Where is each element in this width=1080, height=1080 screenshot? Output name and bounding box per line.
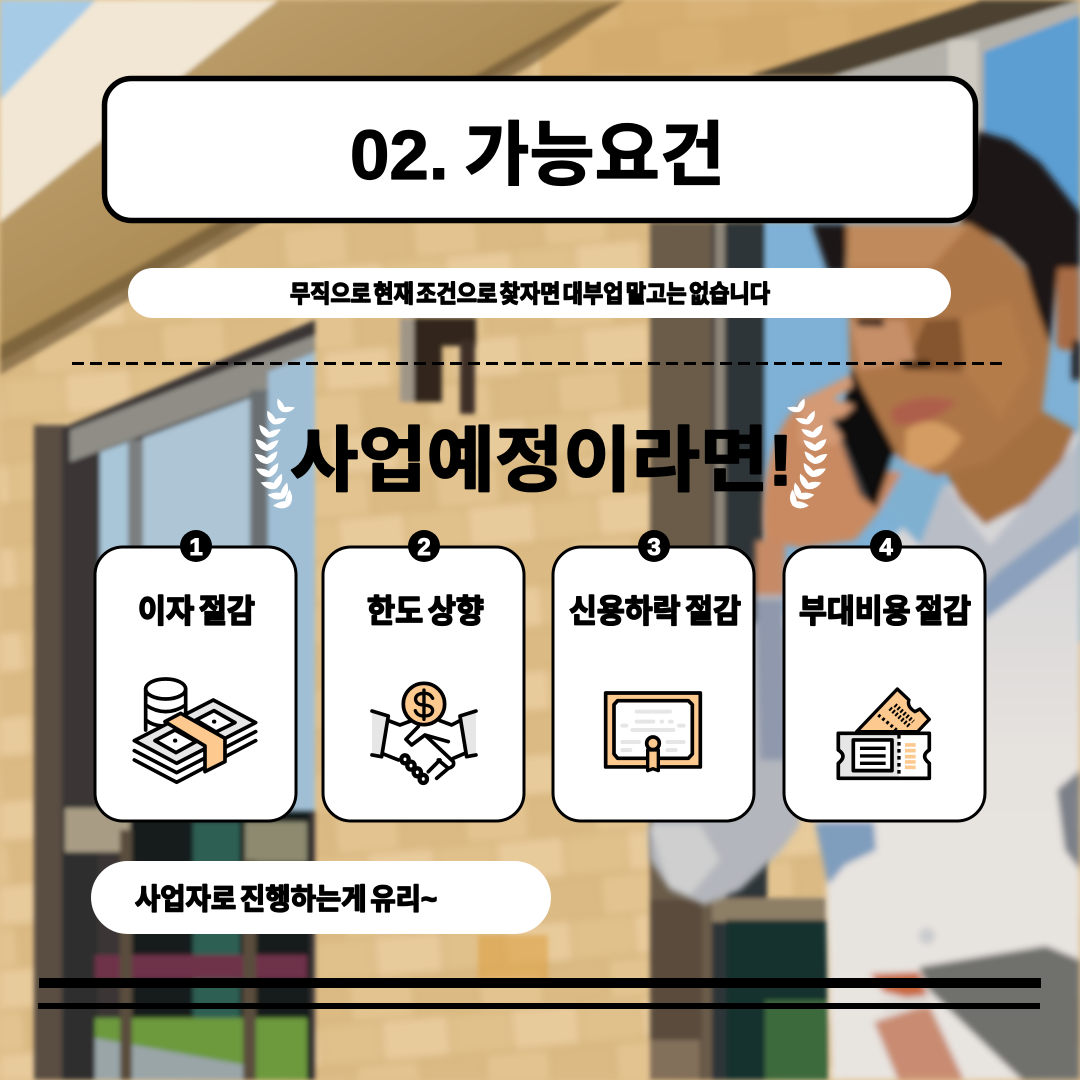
hand with phone [763, 393, 902, 548]
subtitle pill: 무직으로 현재 조건으로 찾자면 대부업 말고는 없습니다 [290, 281, 770, 308]
card title 3: 신용하락 절감 [569, 593, 741, 629]
wall lamp [400, 318, 414, 402]
card 4: ancillary cost savings [784, 530, 985, 821]
badge 3 [638, 530, 670, 562]
sky gap [880, 455, 945, 545]
title box: 02. 가능요건 [350, 116, 725, 194]
laurel left [255, 398, 298, 514]
badge 1 [180, 530, 212, 562]
badge 2: 2 [417, 534, 431, 561]
badge 3: 3 [647, 534, 661, 561]
face [846, 224, 1050, 476]
left window [34, 425, 66, 1080]
sleeve [648, 595, 800, 905]
jacket and lower hand [919, 946, 1080, 1080]
right window and stone [650, 222, 712, 1080]
bottom rules [38, 978, 1041, 1009]
card title 2: 한도 상향 [367, 593, 484, 629]
badge 1: 1 [189, 534, 203, 561]
man [648, 131, 1080, 1080]
badge 2 [408, 530, 440, 562]
laurel right [784, 398, 827, 514]
icon: money stack [134, 679, 256, 782]
icon: tickets [838, 689, 929, 778]
conclusion pill [91, 861, 551, 934]
icon: certificate [606, 693, 700, 771]
card title 4: 부대비용 절감 [799, 593, 971, 629]
ear [1056, 263, 1080, 350]
subtitle pill [128, 268, 951, 318]
icon: handshake [372, 683, 476, 783]
conclusion pill: 사업자로 진행하는게 유리~ [135, 883, 437, 916]
badge 4 [870, 530, 902, 562]
heading: 사업예정이라면! [290, 422, 793, 501]
card 2: limit increase [323, 530, 524, 821]
title box [104, 78, 976, 220]
card title 1: 이자 절감 [138, 593, 255, 629]
badge 4: 4 [879, 534, 893, 561]
neck and collar [945, 410, 1075, 525]
shirt body [780, 430, 1080, 1080]
hair [960, 131, 1080, 345]
dashed divider [72, 362, 1002, 365]
card 3: credit drop savings [553, 530, 754, 821]
card 1: interest savings [95, 530, 296, 821]
